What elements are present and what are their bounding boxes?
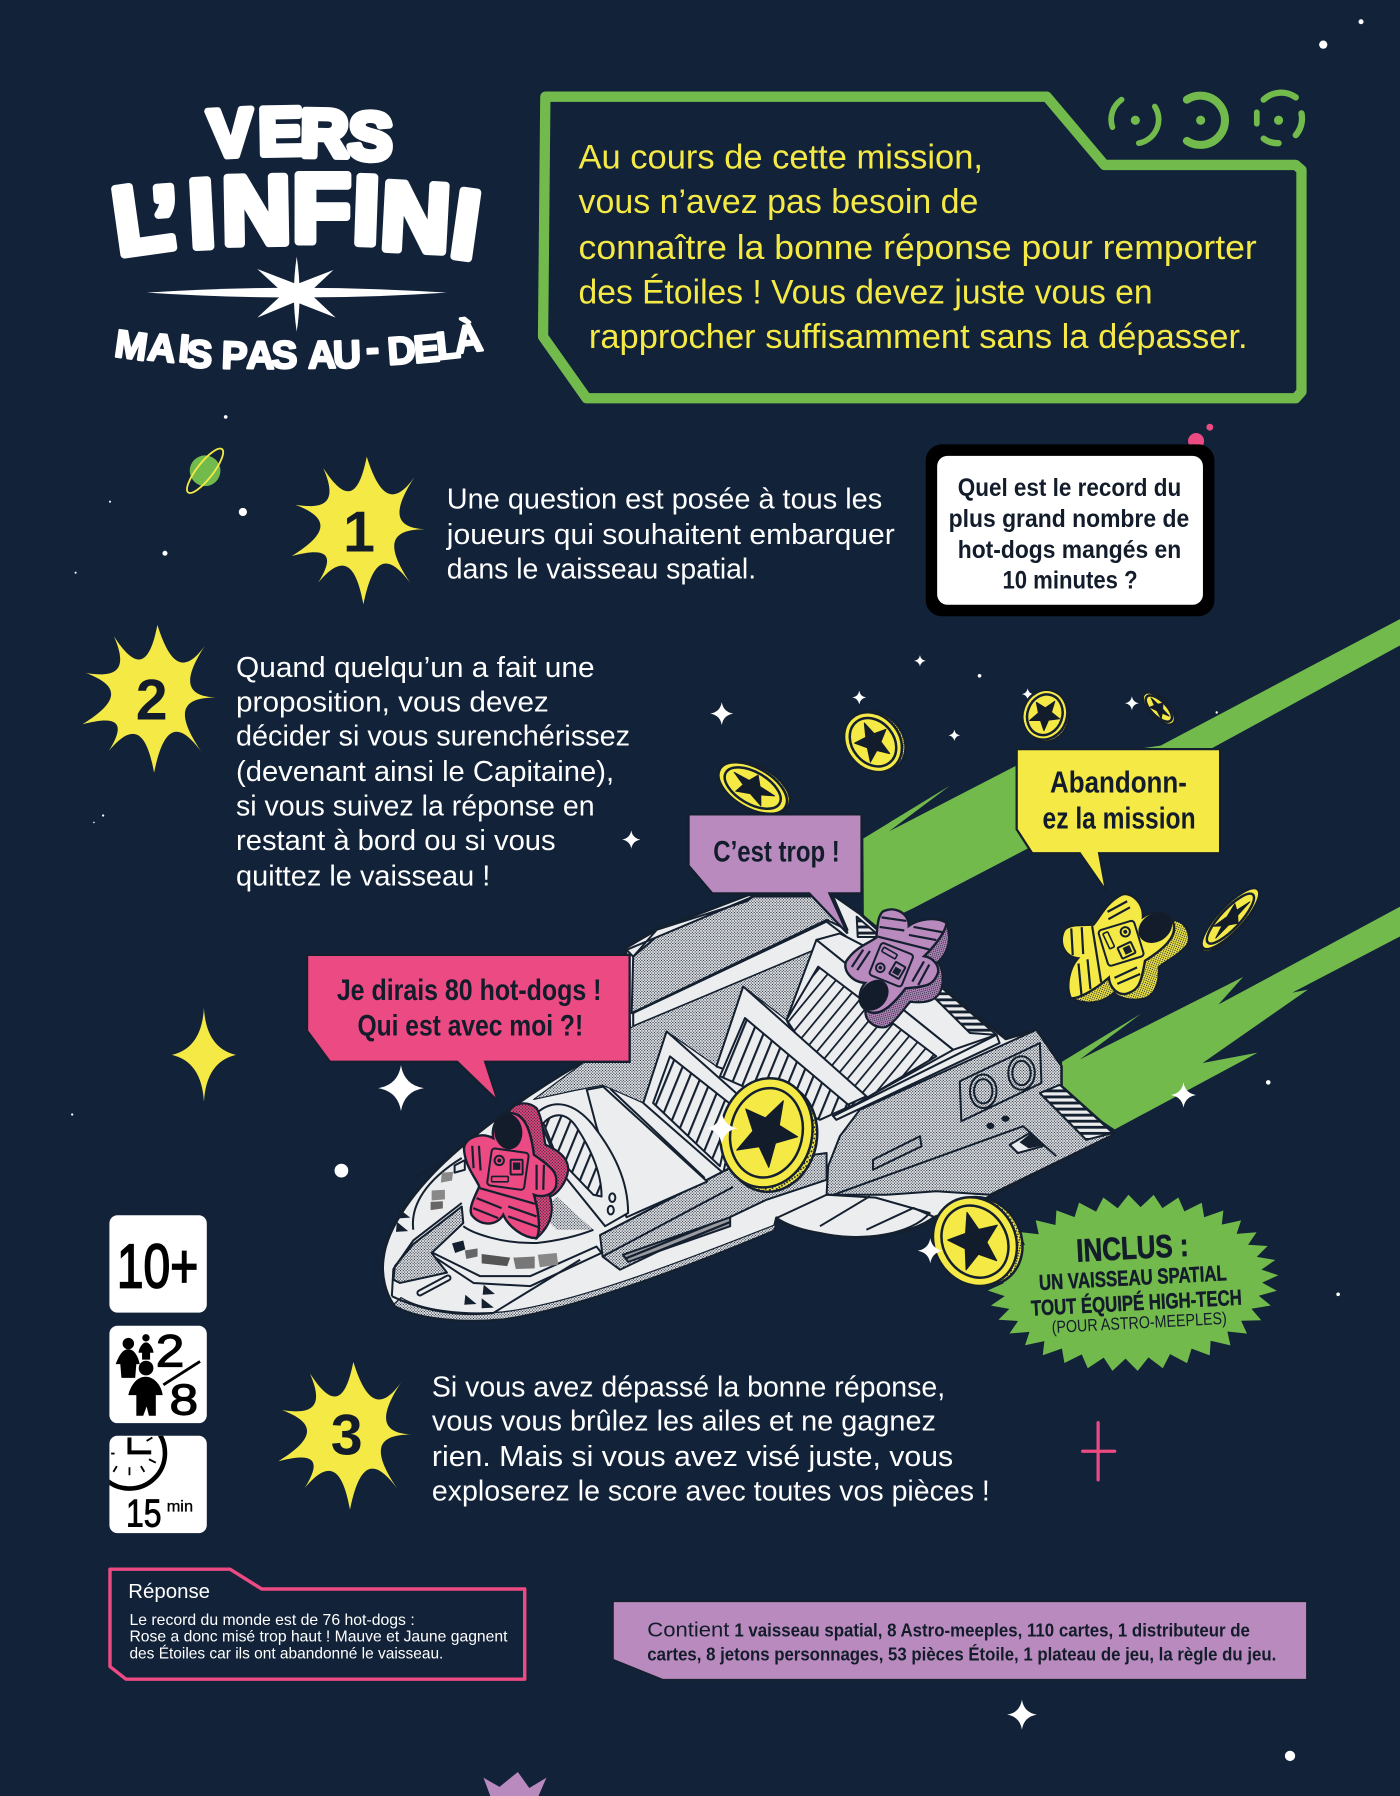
panel: answer (110, 1569, 525, 1679)
panel: answer: Le record du monde est de 76 hot-dogs : (129, 1612, 415, 1629)
side wall (827, 1030, 1113, 1195)
icon: ringed planet (182, 444, 228, 497)
upper green streak (863, 619, 1400, 925)
badge: players 2 to 8: 8 (170, 1377, 198, 1425)
intro text (579, 138, 1257, 356)
step 2 text: proposition, vous devez (236, 686, 549, 718)
step 2 text: restant à bord ou si vous (236, 825, 556, 857)
cockpit seat wedge (587, 1087, 707, 1217)
step 3 text: rien. Mais si vous avez visé juste, vous (432, 1441, 953, 1473)
yellow speech bubble (1017, 749, 1220, 891)
small coins (710, 683, 1268, 959)
step 1 text (446, 484, 895, 585)
instrument pads (431, 1160, 558, 1269)
badge: 15 minutes (94, 1418, 207, 1535)
lavender burst at bottom edge (483, 1772, 546, 1796)
big coin (710, 1070, 828, 1200)
canopy rail (633, 922, 847, 1026)
step 3 badge: 3 (331, 1404, 363, 1468)
coin (1192, 881, 1268, 959)
pink speech bubble: Je dirais 80 hot-dogs ! (337, 974, 601, 1007)
question card: 10 minutes ? (1002, 567, 1138, 595)
front seat (643, 1031, 740, 1173)
front panel (393, 1207, 463, 1283)
step 2 text: si vous suivez la réponse en (236, 791, 595, 823)
control stick (420, 1278, 448, 1293)
panel: answer: des Étoiles car ils ont abandonné le vaisseau. (129, 1646, 443, 1663)
panel: contents: Contient (647, 1618, 730, 1641)
step 3 text: exploserez le score avec toutes vos pièces ! (432, 1475, 990, 1507)
indicator triangles (396, 1208, 495, 1308)
floor (534, 937, 860, 1103)
step 1 text: joueurs qui souhaitent embarquer (446, 519, 895, 551)
panel: answer: Réponse (128, 1580, 210, 1603)
panel: contents (613, 1601, 1307, 1680)
canopy arch (537, 1104, 628, 1226)
vent (623, 1217, 730, 1262)
badge: age 10+: 10+ (117, 1232, 198, 1301)
step 1 text: Une question est posée à tous les (447, 484, 882, 516)
coin (832, 699, 918, 785)
step 2 text: quittez le vaisseau ! (236, 860, 490, 892)
step 3 text (432, 1371, 990, 1507)
cockpit floor (540, 1197, 593, 1230)
step 2 badge: 2 (136, 668, 168, 732)
speaker panel (960, 1043, 1041, 1121)
title line: MAIS PAS AU-DELA: MAIS PAS AU-DELÀ (112, 315, 485, 378)
step 1 badge (292, 457, 428, 604)
hull bottom strip (393, 1224, 776, 1320)
step 3 text: Si vous avez dépassé la bonne réponse, (432, 1371, 945, 1403)
intro text: rapprocher suffisamment sans la dépasser. (589, 318, 1248, 356)
canopy sliver (627, 897, 753, 957)
step 2 text: Quand quelqu’un a fait une (236, 652, 595, 684)
coin (1015, 683, 1077, 748)
step 2 text: décider si vous surenchérissez (236, 721, 630, 753)
pink dots (1188, 424, 1213, 449)
step 3 badge (278, 1362, 415, 1510)
purple speech bubble (689, 814, 862, 934)
icon: players (116, 1334, 163, 1416)
icon: radar signals (1111, 93, 1302, 145)
title (106, 95, 486, 378)
purple speech bubble: C’est trop ! (713, 835, 840, 868)
icon: clock (109, 1436, 168, 1491)
yellow sparkle (172, 1008, 236, 1102)
step 2 text: (devenant ainsi le Capitaine), (236, 756, 614, 788)
wall panel (873, 1136, 922, 1170)
yellow speech bubble: Abandonn- (1050, 765, 1187, 800)
title line: VERS: VERS (207, 95, 394, 175)
intro text: connaître la bonne réponse pour remporter (579, 229, 1257, 267)
badge: players 2 to 8 (109, 1325, 207, 1425)
panel border (543, 97, 1301, 398)
step 3 text: vous vous brûlez les ailes et ne gagnez (432, 1406, 936, 1438)
title star (147, 257, 447, 332)
intro text: des Étoiles ! Vous devez juste vous en (579, 273, 1153, 312)
panel: contents: 1 vaisseau spatial, 8 Astro-meeples, 110 cartes, 1 distributeur de (734, 1619, 1250, 1640)
pink speech bubble (307, 955, 630, 1101)
rear hatch (1040, 1085, 1113, 1140)
title line: L'INFINI: L’INFINI (106, 156, 486, 280)
pink cross sparkle (1083, 1423, 1115, 1480)
badge: 15 minutes: min (167, 1497, 193, 1515)
foreground sparkles (378, 1065, 1196, 1263)
coin (710, 750, 799, 826)
badge: included ship: UN VAISSEAU SPATIAL (1038, 1260, 1227, 1295)
intro text: vous n’avez pas besoin de (579, 183, 978, 221)
coin (1137, 686, 1182, 731)
panel: mission intro (543, 97, 1301, 398)
middle seat (716, 986, 866, 1110)
badge: included ship: (POUR ASTRO-MEEPLES) (1051, 1308, 1227, 1337)
rear panel (816, 933, 997, 1050)
badge: 15 minutes: 15 (126, 1492, 162, 1535)
badge: players 2 to 8: 2 (156, 1325, 184, 1376)
console (433, 1247, 602, 1286)
question card: hot-dogs mangés en (958, 536, 1181, 564)
panel: contents: cartes, 8 jetons personnages, 53 pièces Étoile, 1 plateau de jeu, la règle du jeu. (647, 1643, 1276, 1664)
pink meeple (464, 1103, 568, 1238)
badge: included ship: INCLUS : (1075, 1227, 1189, 1269)
intro text: Au cours de cette mission, (579, 138, 983, 176)
panel: answer: Rose a donc misé trop haut ! Mauve et Jaune gagnent (129, 1628, 508, 1645)
side rail (600, 1153, 827, 1270)
lower coin (916, 1179, 1039, 1304)
question card: Quel est le record du (958, 474, 1181, 502)
step 2 badge (82, 625, 219, 773)
question card (926, 444, 1214, 616)
rear seat (787, 940, 953, 1116)
pink speech bubble: Qui est avec moi ?! (357, 1009, 583, 1042)
step 1 text: dans le vaisseau spatial. (447, 553, 756, 585)
lower green streak (1062, 907, 1400, 1129)
hull (383, 895, 1114, 1320)
question card: plus grand nombre de (949, 505, 1189, 533)
badge: included ship: TOUT ÉQUIPÉ HIGH-TECH (1030, 1285, 1242, 1321)
step 1 badge: 1 (343, 501, 375, 565)
badge: age 10+ (109, 1215, 207, 1313)
badge: included ship (983, 1187, 1283, 1379)
step 2 text (236, 652, 630, 892)
purple meeple (825, 889, 972, 1046)
yellow meeple (1040, 876, 1206, 1027)
spaceship (383, 895, 1114, 1320)
yellow speech bubble: ez la mission (1043, 801, 1196, 836)
lower lobe (777, 1195, 930, 1237)
canopy wall (632, 897, 848, 1013)
